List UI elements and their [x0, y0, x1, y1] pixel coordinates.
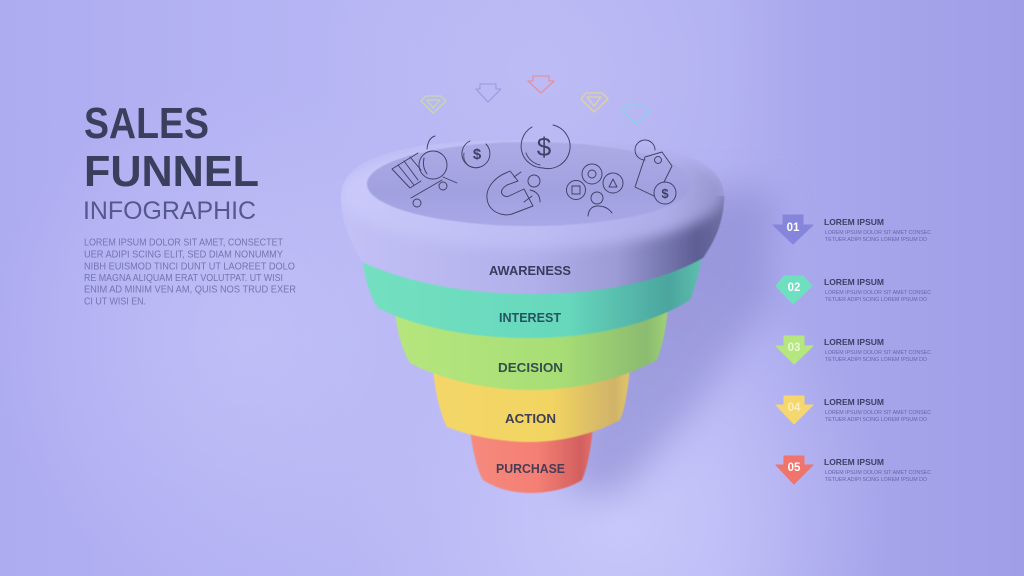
funnel cast shadow: [560, 190, 775, 495]
legend item 03: LOREM IPSUM: [824, 337, 884, 347]
funnel: [338, 137, 726, 493]
icon: magnet: [487, 171, 540, 215]
legend item 04: LOREM IPSUM DOLOR SIT AMET CONSEC: [825, 410, 931, 416]
legend item 04: [776, 396, 931, 424]
icon: small dollar coin: [462, 141, 490, 168]
segment: decision: [395, 308, 668, 390]
legend item 02: LOREM IPSUM DOLOR SIT AMET CONSEC: [825, 290, 931, 296]
legend item 02: LOREM IPSUM: [824, 277, 884, 287]
body paragraph: NIBH EUISMOD TINCI DUNT UT LAOREET DOLO: [84, 262, 295, 272]
segment: purchase: PURCHASE: [496, 461, 565, 476]
body paragraph: RE MAGNA ALIQUAM ERAT VOLUTPAT. UT WISI: [84, 273, 283, 284]
legend item 01: [773, 215, 931, 244]
icon: small dollar coin: $: [473, 146, 482, 163]
legend item 02: TETUER ADIPI SCING LOREM IPSUM DO: [825, 297, 927, 303]
icon: large dollar coin: [521, 125, 570, 169]
icon: shopping cart with magnifier: [392, 136, 457, 207]
legend item 01: LOREM IPSUM: [824, 217, 884, 227]
legend item 03: TETUER ADIPI SCING LOREM IPSUM DO: [825, 357, 927, 363]
body paragraph: CI UT WISI EN.: [84, 296, 146, 308]
segment: interest: INTEREST: [499, 310, 561, 325]
legend item 05: LOREM IPSUM: [824, 457, 884, 467]
segment: awareness: AWARENESS: [489, 263, 571, 278]
legend item 04: 04: [788, 402, 801, 414]
segment: purchase: [470, 426, 593, 493]
icon: price tag with coin: [635, 140, 676, 204]
legend item 02: [776, 276, 931, 304]
funnel icons: [392, 125, 676, 216]
segment: action: ACTION: [505, 411, 556, 426]
legend item 05: 05: [788, 462, 801, 474]
legend item 02: 02: [788, 282, 800, 294]
icon: large dollar coin: $: [537, 132, 552, 162]
legend item 01: LOREM IPSUM DOLOR SIT AMET CONSEC: [825, 230, 931, 236]
arrow: yellow: [581, 93, 608, 112]
floating arrows: [421, 76, 650, 124]
legend item 03: 03: [788, 342, 800, 354]
rim: [338, 137, 726, 249]
body paragraph: [84, 238, 296, 308]
heading: infographic: INFOGRAPHIC: [83, 197, 256, 225]
segment: decision: DECISION: [498, 360, 563, 375]
heading: funnel: FUNNEL: [84, 147, 259, 196]
legend item 04: TETUER ADIPI SCING LOREM IPSUM DO: [825, 417, 927, 423]
icon: person with speech bubbles: [566, 164, 623, 216]
body paragraph: UER ADIPI SCING ELIT, SED DIAM NONUMMY: [84, 250, 283, 260]
legend item 04: LOREM IPSUM: [824, 397, 884, 407]
legend item 03: [776, 336, 931, 364]
heading: sales: SALES: [84, 99, 209, 148]
legend item 05: LOREM IPSUM DOLOR SIT AMET CONSEC: [825, 470, 931, 476]
arrow: yellow-green: [421, 96, 446, 113]
segment: action: [433, 366, 630, 442]
funnel opening: [367, 142, 693, 226]
legend item 05: [776, 456, 931, 484]
icon: price tag with coin: $: [661, 186, 669, 201]
legend item 05: TETUER ADIPI SCING LOREM IPSUM DO: [825, 477, 927, 483]
segment: awareness: [338, 137, 726, 294]
legend item 01: 01: [787, 222, 800, 234]
segment: interest: [362, 250, 703, 338]
title block: [83, 99, 296, 308]
body paragraph: LOREM IPSUM DOLOR SIT AMET, CONSECTET: [84, 238, 283, 248]
arrow: red: [528, 76, 554, 93]
arrow: lavender: [476, 84, 501, 102]
body paragraph: ENIM AD MINIM VEN AM, QUIS NOS TRUD EXER: [84, 284, 296, 296]
legend item 03: LOREM IPSUM DOLOR SIT AMET CONSEC: [825, 350, 931, 356]
legend item 01: TETUER ADIPI SCING LOREM IPSUM DO: [825, 237, 927, 243]
arrow: cyan: [622, 105, 650, 124]
legend: [773, 215, 931, 484]
